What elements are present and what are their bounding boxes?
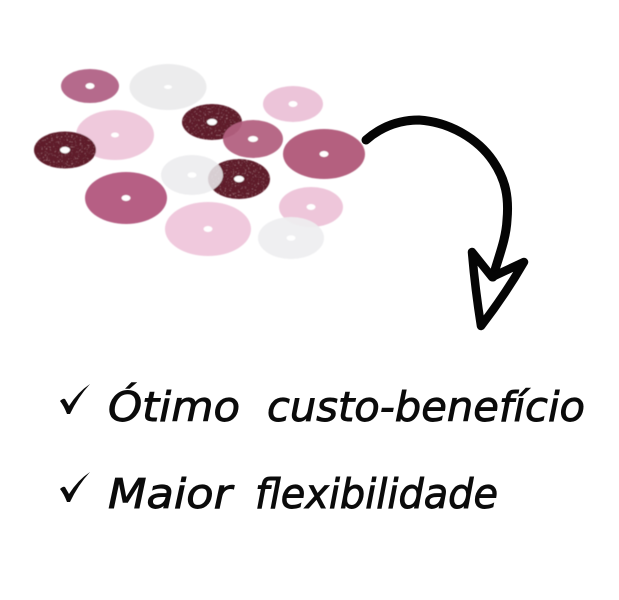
- disc: white top: [130, 64, 206, 110]
- disc: pink bottom: [165, 202, 251, 256]
- illustration: scattered sequin discs: [34, 64, 365, 259]
- benefit text: [108, 470, 498, 518]
- benefit text: [108, 383, 585, 431]
- benefit text: custo-benefício: [267, 383, 585, 431]
- disc: white bottom right: [258, 217, 324, 259]
- arrow: curved from discs down to benefits: [366, 120, 524, 326]
- disc: pink top right: [263, 86, 323, 122]
- icon: check mark: [60, 384, 90, 414]
- benefit text: flexibilidade: [255, 470, 498, 518]
- benefit text: Maior: [108, 470, 234, 518]
- benefit: great cost-benefit: [60, 383, 585, 431]
- disc: large mauve right: [283, 129, 365, 179]
- disc: dark left: [34, 132, 96, 168]
- benefit text: Ótimo: [108, 383, 240, 431]
- disc: pink left: [76, 110, 154, 160]
- disc: mauve bottom left: [85, 172, 167, 224]
- disc: dark upper centre: [182, 104, 242, 140]
- disc: white centre: [161, 155, 223, 195]
- benefit: greater flexibility: [60, 470, 498, 518]
- disc: mauve centre: [223, 120, 283, 158]
- icon: check mark: [60, 472, 90, 502]
- disc: dark centre: [208, 159, 270, 199]
- disc: mauve top left: [61, 69, 119, 103]
- disc: pink right: [279, 187, 343, 227]
